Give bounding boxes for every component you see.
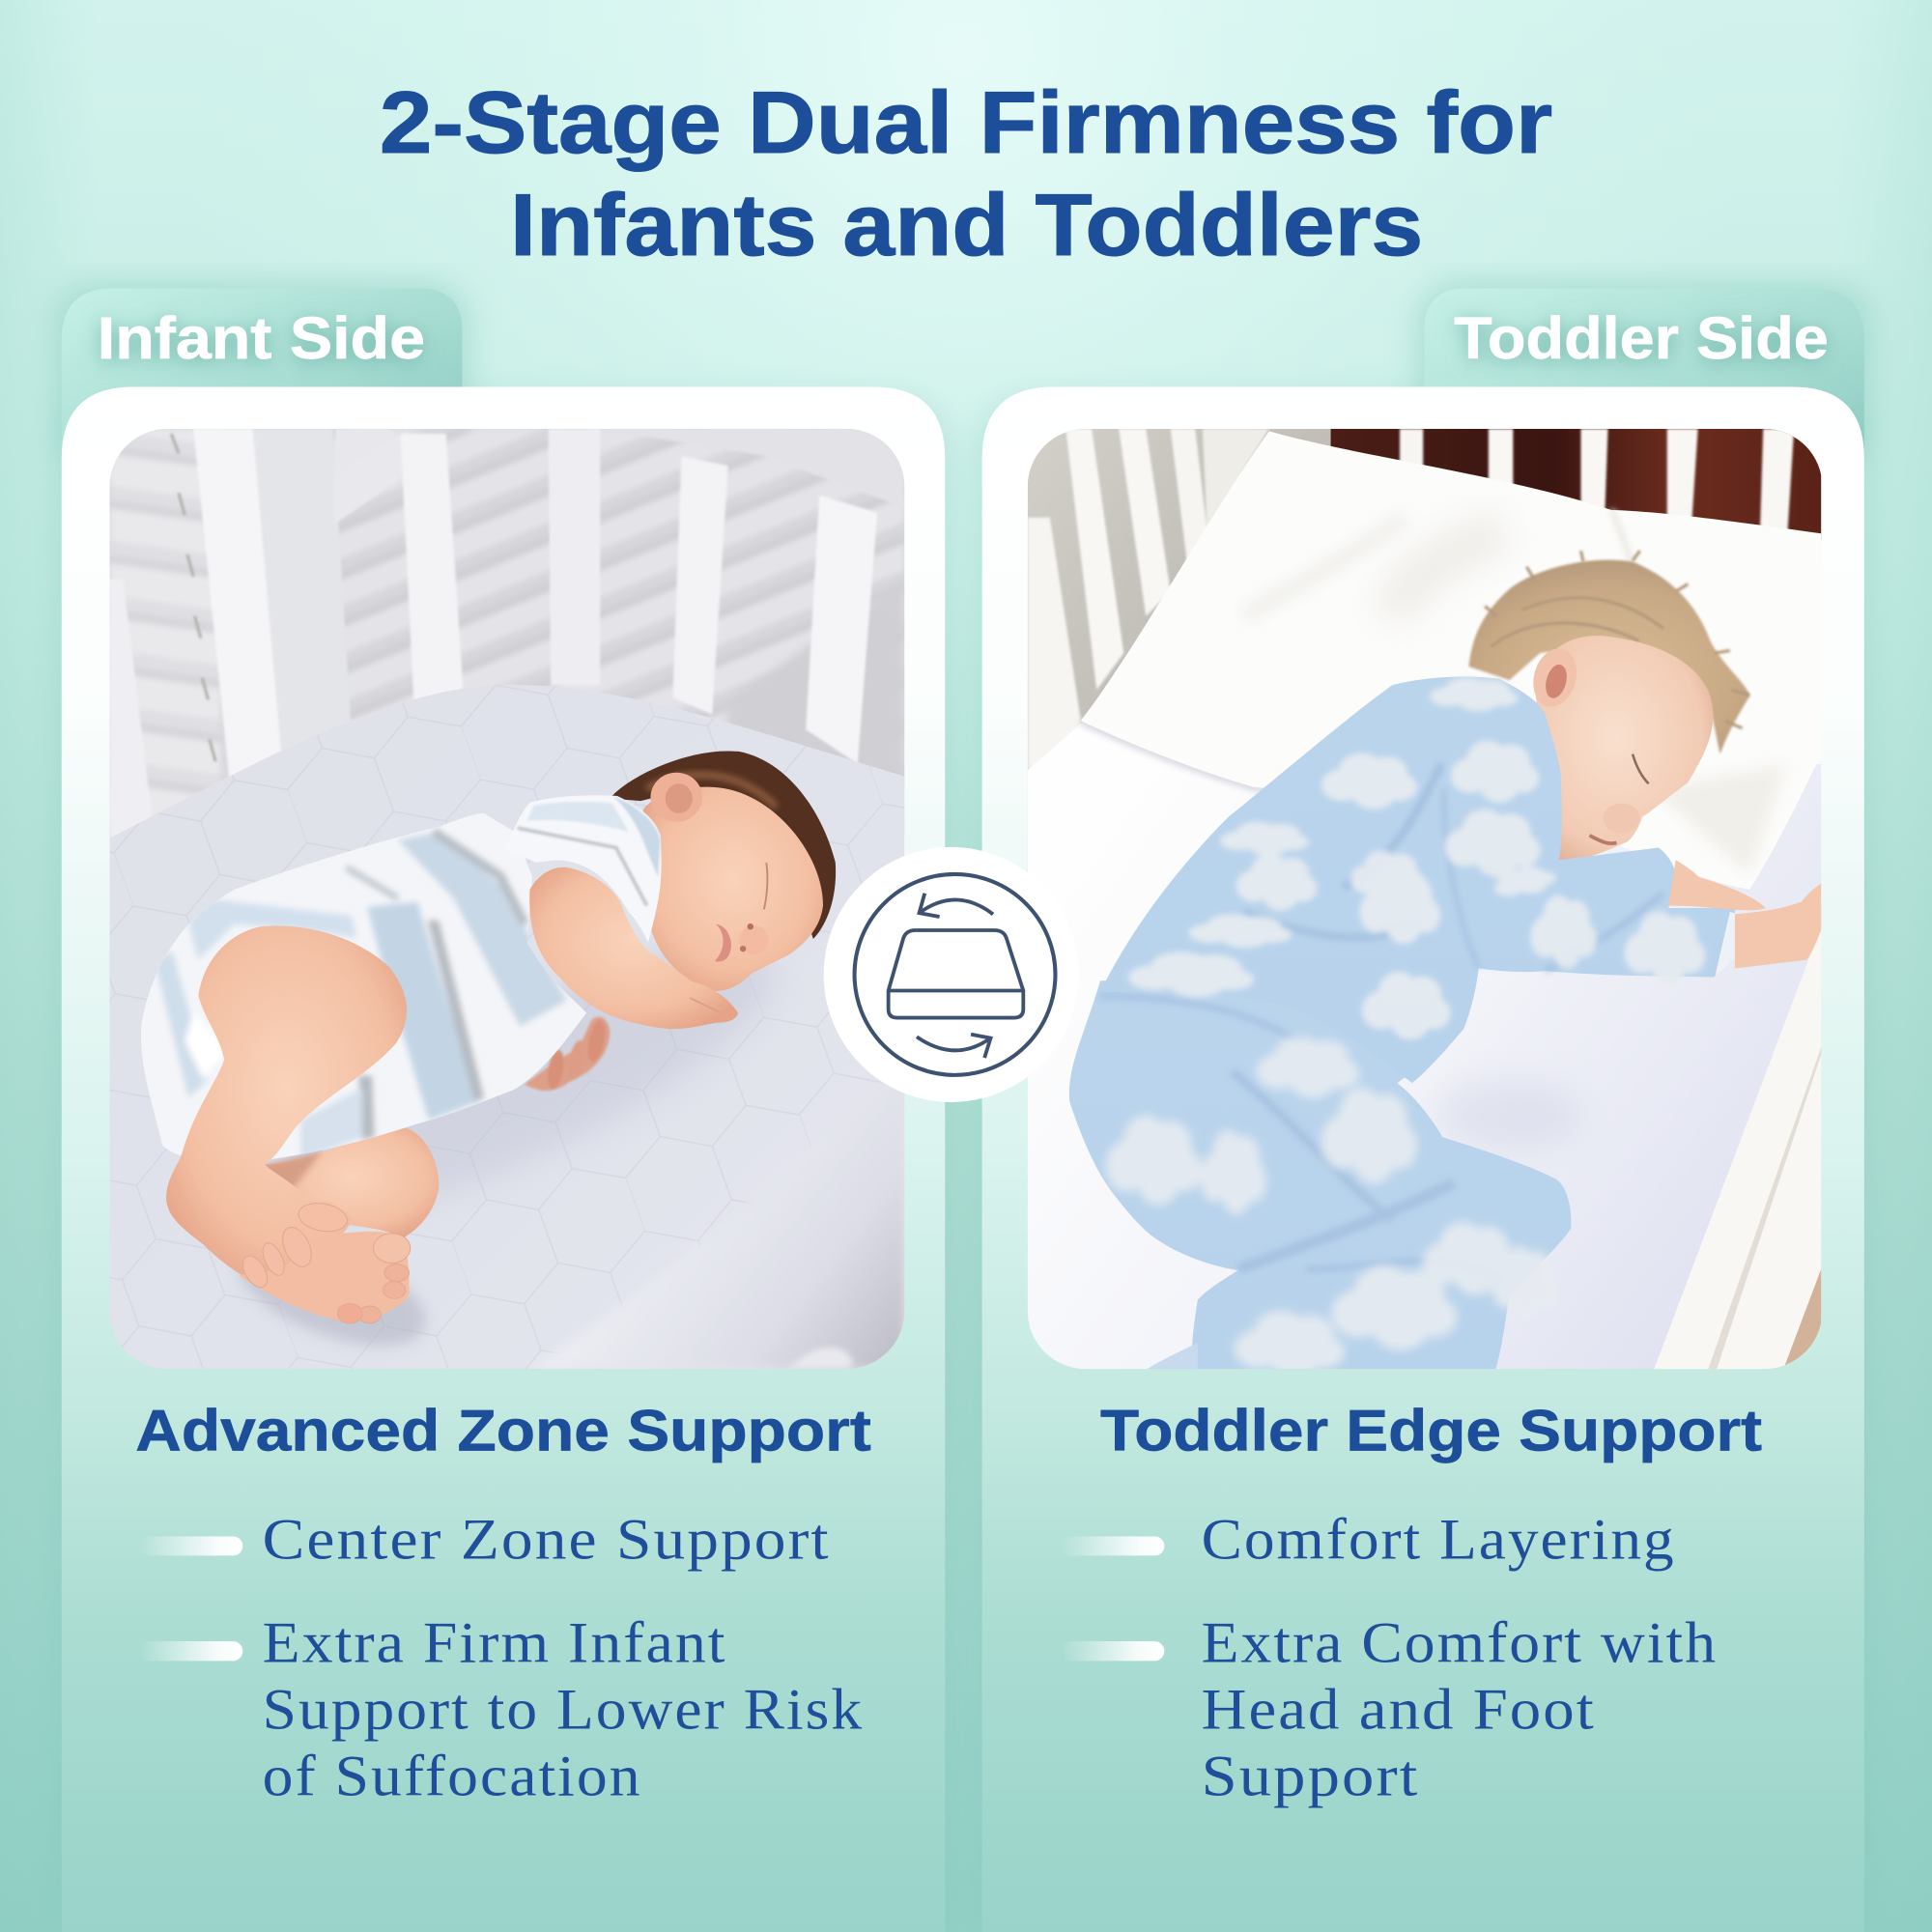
head	[610, 751, 836, 991]
list: infant features: Center Zone Support	[263, 1508, 831, 1572]
second leg	[265, 1126, 439, 1238]
hand under body	[525, 1017, 610, 1091]
tab: toddler side: Toddler Side	[1454, 305, 1829, 371]
thigh and foot	[166, 925, 411, 1323]
tab: toddler side	[1417, 281, 1873, 493]
onesie body	[141, 813, 586, 1162]
title: Infants and Toddlers	[510, 177, 1423, 274]
hands	[1668, 860, 1821, 969]
arm and hand	[529, 867, 738, 1029]
pyjamas top	[1100, 676, 1737, 1083]
list: toddler features: Extra Comfort with	[1202, 1611, 1718, 1675]
photo: sleeping infant on crib mattress	[110, 429, 904, 1369]
panel card	[62, 387, 945, 1932]
panel: infant side	[54, 281, 945, 1932]
tab: infant side	[54, 281, 469, 493]
title: 2-Stage Dual Firmness for	[380, 74, 1552, 172]
foot two	[239, 1232, 409, 1323]
list: infant features: Support to Lower Risk	[263, 1678, 864, 1742]
toddler shadow	[1443, 1082, 1570, 1147]
icon: mattress	[889, 930, 1023, 1018]
icon: flippable mattress badge	[824, 847, 1079, 1102]
icon: bottom arrow	[917, 1035, 991, 1058]
list: toddler features: Support	[1202, 1744, 1419, 1807]
baby shadow	[282, 956, 771, 1194]
list: toddler features	[1061, 1508, 1718, 1807]
heading: toddler edge support: Toddler Edge Support	[1100, 1398, 1762, 1463]
icon: top arrow	[920, 894, 993, 917]
list: infant features	[139, 1508, 864, 1807]
face	[1527, 636, 1713, 861]
list: infant features: Extra Firm Infant	[263, 1611, 727, 1675]
panel card	[982, 387, 1864, 1932]
tab: infant side: Infant Side	[98, 305, 425, 371]
toes one	[298, 1203, 348, 1233]
title	[380, 74, 1552, 274]
list: toddler features: Head and Foot	[1202, 1678, 1596, 1742]
panel: toddler side	[982, 281, 1873, 1932]
pyjamas pants	[1069, 974, 1571, 1378]
pillow	[1081, 431, 1821, 890]
heading: advanced zone support: Advanced Zone Support	[135, 1398, 871, 1463]
mattress sheet	[1028, 721, 1821, 1369]
list: toddler features: Comfort Layering	[1202, 1508, 1676, 1572]
photo: sleeping toddler on crib mattress	[1028, 429, 1821, 1378]
crib rail	[1652, 926, 1821, 1374]
sleeve	[505, 795, 662, 943]
hair	[1468, 551, 1749, 754]
list: infant features: of Suffocation	[263, 1744, 642, 1807]
